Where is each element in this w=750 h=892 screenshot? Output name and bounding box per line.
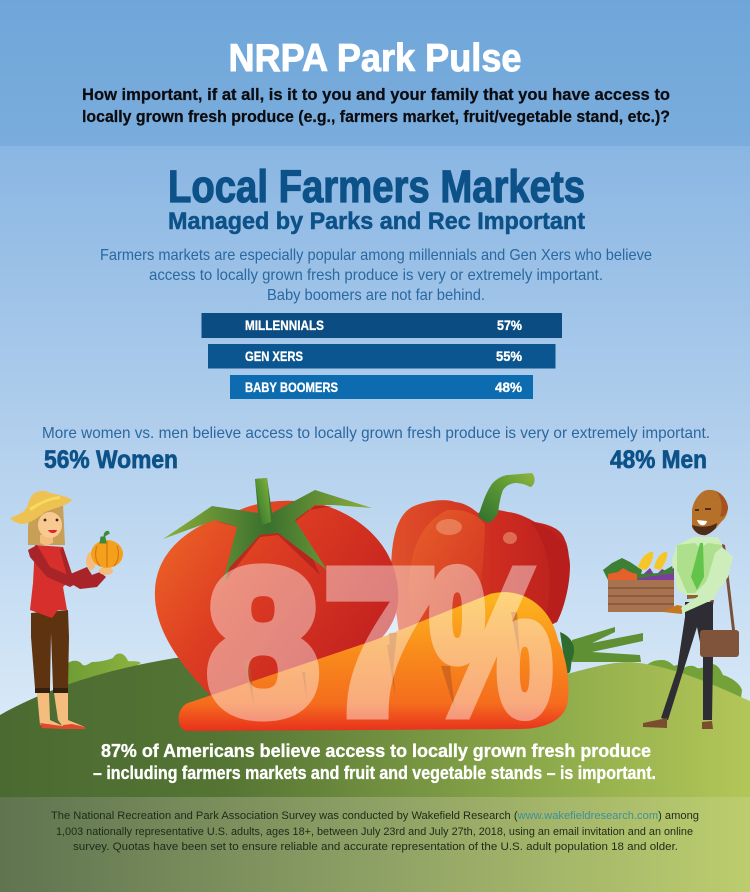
intro paragraph: Baby boomers are not far behind. — [267, 287, 485, 304]
woman neck and face — [40, 535, 53, 546]
bar: baby boomers: 48% — [495, 379, 523, 395]
farmer woman illustration — [10, 491, 123, 729]
bar: gen xers: 55% — [496, 348, 523, 364]
generation bars — [202, 313, 562, 399]
bar: gen xers — [208, 344, 556, 368]
pepper front lobe — [409, 510, 485, 640]
woman hat — [10, 491, 72, 524]
tomato leaves — [163, 478, 372, 585]
man eyes — [695, 509, 711, 510]
pepper right lobe — [530, 522, 570, 622]
summary statement — [93, 740, 656, 783]
main heading: Local Farmers Markets — [168, 161, 585, 212]
man arm — [681, 547, 733, 613]
bar: millennials — [202, 313, 562, 338]
man beard — [692, 523, 717, 535]
title: NRPA Park Pulse — [228, 37, 522, 80]
woman trouser cuffs — [35, 688, 68, 693]
pepper stem — [478, 473, 535, 523]
man vest — [677, 543, 722, 593]
woman trousers — [31, 610, 69, 688]
tomato stem — [255, 478, 271, 525]
carrot crown — [560, 632, 574, 673]
carrot illustration — [179, 592, 643, 731]
pepper highlight — [436, 519, 462, 535]
pumpkin — [91, 540, 123, 568]
survey question: How important, if at all, is it to you and your family that you have access to — [82, 85, 670, 104]
woman hair — [28, 505, 65, 545]
tomato leaf shadow — [215, 506, 333, 580]
woman arms — [28, 545, 92, 587]
bar: baby boomers: BABY BOOMERS — [245, 379, 338, 395]
man tie — [691, 543, 704, 590]
woman legs — [37, 693, 85, 727]
crate vegetables — [603, 552, 674, 580]
pumpkin stem — [100, 531, 109, 543]
intro paragraph: access to locally grown fresh produce is very or extremely important. — [149, 267, 603, 284]
pepper body — [391, 500, 569, 660]
man hair — [716, 491, 728, 517]
carrot marks — [243, 612, 520, 710]
woman hands — [86, 552, 96, 570]
carrot body — [179, 592, 569, 731]
summary statement: 87% of Americans believe access to locally grown fresh produce — [101, 740, 651, 761]
carrot greens — [572, 627, 643, 662]
ground hill — [0, 640, 750, 800]
wooden crate — [608, 580, 674, 612]
bush left — [68, 653, 141, 690]
man bag strap — [706, 544, 735, 630]
man with crate illustration — [603, 490, 739, 729]
big 87% figure: 8 — [207, 528, 319, 757]
woman shoes — [40, 723, 85, 729]
summary statement: – including farmers markets and fruit and vegetable stands – is important. — [93, 762, 656, 783]
bar: millennials: MILLENNIALS — [245, 317, 324, 333]
intro paragraph: Farmers markets are especially popular among millennials and Gen Xers who believe — [100, 247, 652, 264]
man smile — [697, 520, 707, 525]
big 87% figure: % — [430, 528, 552, 757]
intro paragraph — [100, 247, 652, 304]
gender statement: More women vs. men believe access to locally grown fresh produce is very or extremely important. — [42, 425, 710, 442]
man hand — [663, 605, 682, 614]
bar: gen xers: GEN XERS — [245, 348, 303, 364]
bar: baby boomers — [230, 375, 533, 399]
stat: men: 48% Men — [610, 446, 707, 474]
survey methodology note — [51, 810, 699, 853]
survey methodology note: 1,003 nationally representative U.S. adults, ages 18+, between July 23rd and July 27th, 2018, using an email invitation and an online — [56, 826, 693, 838]
man belt — [687, 595, 698, 599]
survey methodology note: The National Recreation and Park Association Survey was conducted by Wakefield Research ( www.wakefieldresearch.com) among — [51, 810, 699, 822]
bar: millennials: 57% — [497, 317, 522, 333]
man bag — [700, 630, 739, 657]
footer band — [0, 797, 750, 892]
man shoes — [643, 718, 713, 729]
man trousers — [661, 602, 713, 720]
survey methodology note: survey. Quotas have been set to ensure reliable and accurate representation of the U.S. adult population 18 and older. — [73, 841, 678, 853]
man shirt — [672, 537, 722, 595]
woman blouse — [30, 545, 73, 618]
pepper illustration — [391, 473, 570, 660]
big 87% figure: 7 — [324, 528, 437, 757]
survey question: locally grown fresh produce (e.g., farmers market, fruit/vegetable stand, etc.)? — [82, 107, 670, 126]
sub heading: Managed by Parks and Rec Important — [168, 208, 585, 235]
survey question — [82, 85, 670, 126]
tomato illustration — [155, 478, 398, 700]
big 87% figure — [207, 528, 552, 757]
bush right — [647, 660, 742, 698]
stat: women: 56% Women — [44, 446, 178, 474]
tomato body — [155, 501, 398, 700]
sky background — [0, 146, 750, 746]
man head — [692, 490, 728, 535]
header band — [0, 0, 750, 146]
